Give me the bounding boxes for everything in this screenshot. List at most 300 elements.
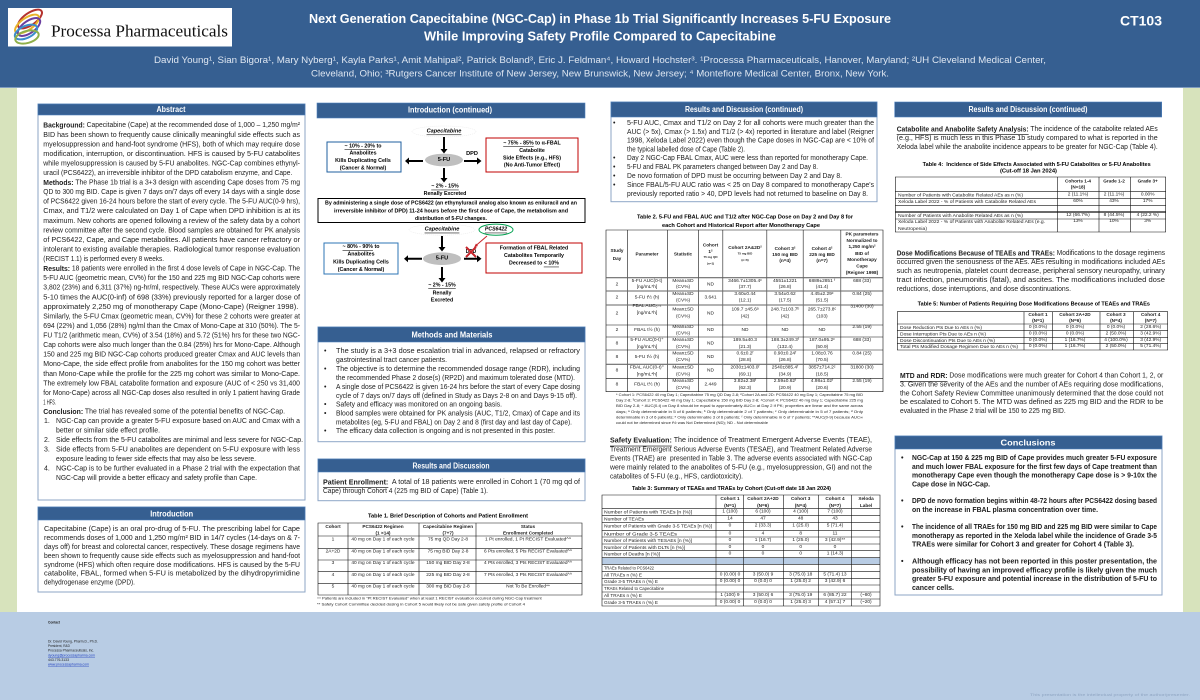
heading: results and discussion: Results and Discussion bbox=[412, 462, 490, 470]
table 2: PK parameters: (n=1) bbox=[707, 261, 714, 265]
box: catabolites reduced: Catabolites Temporarily bbox=[504, 253, 564, 259]
authors and affiliations: Cleveland, Ohio; ³Rutgers Cancer Institute of New Jersey, New Brunswick, New Jersey; ⁴ Montefiore Medical Center, Bronx, New York. bbox=[311, 68, 889, 80]
table 2 footnotes: Day 2-8; ³Cohort 3: PCS6422 40 mg Day 1; Capecitabine 150 mg BID Day 2-8; ⁴Cohort 4: PCS6422 40 mg Day 1; Capecitabine 225 mg bbox=[616, 399, 863, 403]
heading: abstract: Abstract bbox=[156, 105, 186, 114]
table 5: dose modifications bbox=[897, 312, 1168, 350]
panel: results and discussion bbox=[318, 459, 585, 501]
arrow: to renal excretion bbox=[438, 267, 446, 282]
table 1 footnotes: ** Safety Cohort Committee decided dosing in Cohort 5 would likely not be safe given safety profile of Cohort 4 bbox=[317, 602, 525, 606]
table 1: cohorts and enrollment: 4 bbox=[332, 572, 335, 578]
contact block: 443.776.3133 bbox=[48, 658, 69, 662]
methods bullet list: • bbox=[324, 410, 327, 418]
box: anabolites: ~ 10% - 20% to bbox=[345, 143, 382, 149]
table 2: PK parameters: 248.7±103.7ᵇ bbox=[771, 306, 799, 312]
table 2 footnotes: could not be determined since t½ was Not Determined (ND); ND - Not determinable bbox=[616, 421, 768, 425]
methods bullet list: cycle of 7 days on/7 days off (defined in Study as Days 2-8 on and Days 9-15 off). bbox=[336, 393, 577, 400]
table 2: PK parameters: BID of bbox=[855, 251, 869, 256]
conclusions bullet list: • bbox=[901, 556, 904, 566]
table 5: dose modifications: 0 (0.0%) bbox=[1029, 324, 1047, 330]
box: catabolites reduced: Formation of FBAL Related bbox=[500, 245, 568, 251]
dose modifications text: reductions, dose interruptions, and dose discontinuations. bbox=[897, 286, 1071, 293]
arrow: DPD to catabolite bbox=[464, 158, 482, 164]
table 2: PK parameters: ND bbox=[707, 354, 714, 360]
table 2: PK parameters: (103) bbox=[816, 314, 828, 320]
table 3: TEAEs and TRAEs by cohort: Grade 3-5 TRAEs n (%) E bbox=[604, 579, 658, 584]
table 2: PK parameters: 2.449 bbox=[704, 382, 717, 388]
table 4: side effects by catabolite and anabolite: Number of Patients with Catabolite Related AEs as n (%) bbox=[898, 192, 1024, 198]
table 2: PK parameters: ND bbox=[707, 282, 714, 288]
table 3: TEAEs and TRAEs by cohort: 1 (16.7) bbox=[755, 537, 772, 543]
table 3: TEAEs and TRAEs by cohort: (N=4) bbox=[795, 503, 807, 508]
table 2: PK parameters: Cohort 2A&2D² bbox=[728, 245, 762, 250]
table 4: side effects by catabolite and anabolite: Number of Patients with Anabolite Related AEs as n (%) bbox=[898, 213, 1024, 218]
table 3: TEAEs and TRAEs by cohort: 4 bbox=[762, 530, 765, 536]
box: anabolites: Kills Duplicating Cells bbox=[333, 259, 389, 265]
diagram: capecitabine metabolism without PCS6422 bbox=[327, 126, 578, 197]
box: catabolite: Side Effects (e.g., HFS) bbox=[503, 155, 561, 161]
table 2: PK parameters: 109.7 ±45.6ᵃ bbox=[731, 306, 759, 312]
safety evaluation text bbox=[609, 437, 872, 480]
conclusions bullet list: on the increase in FBAL plasma concentration over time. bbox=[912, 505, 1098, 514]
results bullet list: • bbox=[613, 182, 616, 189]
table 3: TEAEs and TRAEs by cohort: 0 (0.0) 0 bbox=[754, 578, 772, 584]
table 2: PK parameters: 1² bbox=[708, 249, 713, 254]
table 3: TEAEs and TRAEs by cohort: (N=7) bbox=[829, 503, 841, 508]
table 3: TEAEs and TRAEs by cohort: TRAEs Related to PCS6422 bbox=[604, 565, 654, 570]
table 2: PK parameters: ND bbox=[819, 327, 826, 333]
table 3: TEAEs and TRAEs by cohort: (N=1) bbox=[724, 503, 736, 508]
abstract text: approximately 2,250 mg of monotherapy Cape (Mono-Cape) (Reigner 1998). bbox=[43, 304, 298, 311]
title: Next Generation Capecitabine (NGC-Cap) in Phase 1b Trial Significantly Increases 5-FU Exposure bbox=[309, 12, 891, 26]
table 5 title: Table 5: Number of Patients Requiring Dose Modifications Because of TEAEs and TRAEs bbox=[918, 301, 1150, 307]
arrow: to anabolites bbox=[405, 158, 423, 164]
table 5: dose modifications: 4 (100.0%) bbox=[1104, 337, 1128, 343]
table 1: cohorts and enrollment: 6 Pts enrolled, 5 Pts RECIST Evaluated^^ bbox=[484, 548, 573, 554]
abstract text: of PCS6422, Cape, and Cape metabolites. All patients have cancer refractory or bbox=[43, 237, 301, 244]
table 2 title: Table 2. 5-FU and FBAL AUC and T1/2 after NGC-Cap Dose on Day 2 and Day 8 for bbox=[637, 214, 853, 220]
table 2 title bbox=[637, 214, 853, 229]
abstract text: 2. bbox=[44, 437, 50, 444]
introduction text: syndrome (HFS) which often require dose modifications. HFS is caused by the 5-FU bbox=[44, 562, 300, 569]
PCS6422 marker bbox=[479, 224, 513, 235]
table 3: TEAEs and TRAEs by cohort: 1 (14.3) bbox=[827, 550, 844, 556]
abstract text: 5-FU AUC (geometric mean, CV%) for the 150 and 225 mg BID NGC-Cap cohorts were bbox=[43, 275, 300, 282]
conclusions bullet list: The incidence of all TRAEs for 150 mg BID and 225 mg BID were similar to Cape bbox=[912, 522, 1157, 531]
table 2: PK parameters: 8 bbox=[616, 368, 619, 374]
table 5: dose modifications: 0 (0.0%) bbox=[1066, 324, 1084, 330]
results bullet list: • bbox=[613, 164, 616, 171]
table 5: dose modifications: 1 (16.7%) bbox=[1065, 343, 1086, 349]
table 1 footnotes bbox=[317, 596, 542, 606]
table 2: PK parameters: (CV%) bbox=[676, 330, 690, 336]
abstract text: NGC-Cap is to be further evaluated in a Phase 2 trial with the expectation that bbox=[56, 466, 300, 472]
icon: red X and inhibition arrow bbox=[466, 236, 487, 257]
table 2: PK parameters: [ng/mL*h] bbox=[637, 284, 657, 290]
table 3: TEAEs and TRAEs by cohort: Grade 3-5 TRAEs n (%) E bbox=[604, 600, 658, 605]
table 3: TEAEs and TRAEs by cohort: 0 bbox=[729, 537, 732, 543]
table 2: PK parameters: (17.5) bbox=[779, 298, 792, 304]
heading: results continued: Results and Discussion (continued) bbox=[685, 105, 803, 114]
abstract text: better or similar side effect profile. bbox=[56, 428, 160, 434]
abstract text: 4. bbox=[44, 466, 50, 472]
table 5: dose modifications: 2 (28.6%) bbox=[1140, 324, 1162, 330]
patient enrollment text bbox=[323, 479, 580, 495]
heading: results and discussion bbox=[318, 459, 585, 472]
table 2: PK parameters: 225 mg BID bbox=[809, 252, 835, 257]
box: catabolites reduced: Decreased to < 10% bbox=[509, 261, 559, 267]
dose modifications text bbox=[897, 250, 1166, 293]
table 3: TEAEs and TRAEs by cohort: Number of Patients with TESAEs [n (%)] bbox=[604, 538, 692, 543]
methods bullet list: • bbox=[324, 366, 327, 373]
methods bullet list: Safety and efficacy was monitored on an ongoing basis. bbox=[336, 402, 502, 408]
methods bullet list: • bbox=[324, 384, 327, 391]
table 1: cohorts and enrollment: PCS6422 Regimen bbox=[362, 524, 404, 529]
table 1: cohorts and enrollment: 1 Pt enrolled, 1 Pt RECIST Evaluated^^ bbox=[485, 536, 572, 542]
methods bullet list: A single dose of PCS6422 is given 16-24 hrs before the start of every Cape dosing bbox=[336, 384, 580, 391]
table 2: PK parameters: 2.55 (19) bbox=[852, 324, 872, 330]
table 2: PK parameters: (CV%) bbox=[676, 357, 690, 363]
table 1: cohorts and enrollment: 40 mg on Day 1 of each cycle bbox=[351, 548, 415, 554]
table 3: TEAEs and TRAEs by cohort: 3 (75.0) 19 bbox=[789, 592, 813, 598]
box: anabolites: (Cancer & Normal) bbox=[340, 165, 386, 171]
box: anabolites: ~ 80% - 90% to bbox=[343, 244, 380, 250]
table 2: PK parameters: (26.8) bbox=[779, 284, 792, 290]
table 3: TEAEs and TRAEs by cohort: 0 bbox=[729, 530, 732, 536]
table 2: PK parameters: (50.9) bbox=[816, 344, 829, 350]
table 2: PK parameters: PK parameters bbox=[845, 232, 879, 236]
table 2: PK parameters: 5-FU AUC(0-t) bbox=[632, 278, 663, 284]
table 2: PK parameters: (132.4) bbox=[777, 344, 793, 350]
table 2: PK parameters: (n=6) bbox=[741, 258, 749, 262]
authors and affiliations bbox=[154, 55, 1046, 80]
conclusions bullet list: possibility of having an improved efficacy profile is likely given the much bbox=[912, 565, 1157, 574]
table 3: TEAEs and TRAEs by cohort: 6 (100) bbox=[755, 508, 771, 514]
table 3: TEAEs and TRAEs by cohort: All TRAEs n (%) E bbox=[604, 572, 642, 578]
heading: introduction: Introduction bbox=[150, 510, 193, 518]
results bullet list: 5-FU and FBAL PK parameters changed between Day 2 and Day 8. bbox=[627, 164, 818, 171]
callout: PCS6422 explanation: By administering a single dose of PCS6422 (an ethynyluracil analog also known as eniluracil and an bbox=[325, 200, 578, 206]
table 3: TEAEs and TRAEs by cohort: 7 (100) bbox=[827, 508, 843, 514]
node: 5-FU bbox=[423, 252, 461, 265]
conclusions bullet list: • bbox=[901, 496, 904, 505]
table 3: TEAEs and TRAEs by cohort: (~20) bbox=[860, 599, 872, 605]
table 3: TEAEs and TRAEs by cohort: 2 (33.3) bbox=[755, 522, 772, 528]
table 1: cohorts and enrollment: Cohort bbox=[325, 524, 341, 529]
table 2: PK parameters: (70.5) bbox=[816, 357, 829, 363]
table 2: PK parameters: 265.7±273.8ᶜ bbox=[808, 306, 836, 312]
label: renally excreted: Renally Excreted bbox=[424, 191, 466, 197]
safety evaluation text: Events (TRAE) are presented in Table 3. The adverse events associated with NGC-Cap bbox=[610, 456, 872, 462]
MTD and RDR text: the Cohort Safety Review Committee unanimously determined that the dose could not bbox=[900, 390, 1163, 398]
diagram: capecitabine metabolism without PCS6422: Capecitabine bbox=[427, 128, 461, 134]
table 2: PK parameters: (12.1) bbox=[739, 298, 752, 304]
table 3: TEAEs and TRAEs by cohort: 14 bbox=[727, 516, 733, 522]
abstract text bbox=[42, 122, 303, 482]
results bullet list: AUC (> 5x), Cmax (> 1.5x) and T1/2 (> 4x) reported in literature and label (Reigner bbox=[627, 129, 875, 136]
table 2: PK parameters: 189.5±40.3 bbox=[733, 337, 757, 343]
table 2: PK parameters: (21.3) bbox=[739, 344, 752, 350]
conclusions bullet list: • bbox=[901, 453, 904, 462]
table 2: PK parameters: FBAL t½ (h) bbox=[634, 380, 660, 388]
methods bullet list: Blood samples were obtained for PK analysis (AUC, T1/2, Cmax) of Cape and its bbox=[336, 410, 580, 418]
abstract text: The extremely low FBAL catabolite formation and exposure (AUC of < 250 vs 31,400 bbox=[43, 380, 300, 387]
table 2: PK parameters: [ng/mL*h] bbox=[637, 372, 657, 378]
table 4: side effects by catabolite and anabolite: Xeloda Label 2022 - % of Patients with Catabolite Related AEs bbox=[898, 199, 1037, 204]
contact block: Processa Pharmaceuticals, Inc. bbox=[48, 649, 94, 653]
table 3: TEAEs and TRAEs by cohort: 1 (25.0) bbox=[792, 522, 809, 528]
table 2: PK parameters: (42) bbox=[781, 314, 790, 320]
table 2: PK parameters: 2.55 (19) bbox=[852, 378, 872, 384]
table 5: dose modifications: 0 (0.0%) bbox=[1029, 343, 1047, 349]
table 5: dose modifications: Total Pts Modified Dosage Regimen Due to AEs n (%) bbox=[900, 344, 1018, 349]
title bbox=[309, 12, 891, 44]
table 2: PK parameters: 2 bbox=[616, 294, 619, 300]
abstract text: QD to 300 mg BID. Cape is given 7 days on/7 days off every 14 days with a single dose bbox=[43, 189, 300, 196]
abstract text: BID has been shown to frequently cause clinically meaningful side effects such as bbox=[43, 132, 300, 139]
table 3: TEAEs and TRAEs by cohort: 1 (25.0) 2 bbox=[790, 578, 811, 584]
table 3: TEAEs and TRAEs by cohort: 48 bbox=[798, 516, 804, 522]
table 2: PK parameters: 688 (33) bbox=[853, 337, 871, 343]
table 2: PK parameters: 8 bbox=[616, 382, 619, 388]
table 4: side effects by catabolite and anabolite: 0.00% bbox=[1141, 192, 1155, 198]
table 2 title: each Cohort and Historical Report after Monotherapy Cape bbox=[662, 223, 820, 229]
results bullet list: previously reported ratio > 40, DPD levels had not returned to baseline on Day 8. bbox=[627, 191, 868, 198]
table 2: PK parameters: 6889±2851 ᶠ bbox=[809, 278, 835, 284]
table 3: TEAEs and TRAEs by cohort: 0 bbox=[834, 544, 837, 550]
table 3: TEAEs and TRAEs by cohort: Cohort 4 bbox=[825, 496, 845, 501]
table 3: TEAEs and TRAEs by cohort: 5 (71.4) bbox=[827, 522, 844, 528]
panel: introduction bbox=[38, 507, 305, 592]
table 2: PK parameters bbox=[606, 230, 883, 392]
table 2: PK parameters: (CV%) bbox=[676, 284, 690, 290]
table 4: side effects by catabolite and anabolite: 8 (44.5%) bbox=[1104, 212, 1125, 218]
table 2: PK parameters: ND bbox=[742, 327, 749, 333]
table 3: TEAEs and TRAEs by cohort: 3 (42.9)** bbox=[825, 537, 845, 543]
patient enrollment text: Cape) through Cohort 4 (225 mg BID of Cape) (Table 1). bbox=[323, 488, 488, 495]
safety evaluation text: were mainly related to the anabolites of 5-FU (e.g., myelosuppression, GI) and not the bbox=[609, 464, 872, 472]
table 3: TEAEs and TRAEs by cohort: 1 (100) 9 bbox=[720, 592, 740, 598]
MTD and RDR text: 3. Given the severity of the AEs and the number of AEs requiring dose modifications, bbox=[900, 382, 1163, 388]
table 2: PK parameters: 2540±885.4ᶠ bbox=[772, 364, 798, 370]
table 4: side effects by catabolite and anabolite: Grade 1-2 bbox=[1103, 178, 1125, 184]
table 3: TEAEs and TRAEs by cohort: 1 (100) bbox=[722, 508, 738, 514]
table 2: PK parameters: Day bbox=[613, 256, 622, 261]
introduction text: Capecitabine (Cape) is an oral pro-drug of 5-FU. The prescribing label for Cape bbox=[44, 526, 300, 533]
node: 5-FU bbox=[425, 154, 463, 166]
abstract text: review committee after the second cycle. Blood samples are obtained for PK analysis bbox=[43, 227, 300, 234]
table 2: PK parameters: ND bbox=[707, 310, 714, 316]
table 3: TEAEs and TRAEs by cohort: Cohort 1 bbox=[720, 496, 740, 501]
table 4: side effects by catabolite and anabolite: Neutropenia) bbox=[898, 226, 928, 231]
dose modifications text: tract infection, pneumonitis (fatal), and ascites. The modifications included dose bbox=[897, 277, 1165, 284]
table 2: PK parameters: (CV%) bbox=[676, 344, 690, 350]
contact block: dyoung@processapharma.com bbox=[48, 653, 95, 657]
label: renally excreted: Excreted bbox=[431, 298, 453, 304]
table 4 title bbox=[923, 162, 1151, 174]
table 2: PK parameters: Mean±SD bbox=[672, 337, 694, 343]
table 2: PK parameters: 1,250 mg/m² bbox=[848, 244, 876, 249]
methods bullet list: The objective is to determine the recommended dosage range (RDR), including bbox=[336, 366, 580, 373]
table 2: PK parameters: Cape bbox=[856, 264, 868, 268]
results bullet list: De novo formation of DPD must be occurring between Day 2 and Day 8. bbox=[627, 173, 842, 180]
results bullet list: • bbox=[613, 173, 616, 180]
table 2: PK parameters: Mean±SD bbox=[672, 291, 694, 297]
box: anabolites: Kills Duplicating Cells bbox=[335, 158, 391, 164]
logo bbox=[8, 6, 232, 47]
table 2: PK parameters: 3466.7±1305.4ᶜ bbox=[728, 278, 762, 284]
abstract text: Cmax, and T1/2 were calculated on Day 1 of Cape when DPD inhibition is at its bbox=[43, 208, 301, 215]
abstract text: Similarly, the 5-FU Cmax (geometric mean, CV%) for these 2 cohorts were greater at bbox=[43, 313, 300, 320]
abstract text: for Mono-Cape) across all NGC-Cap doses also resulted in only 1 patient having Grade bbox=[43, 390, 300, 397]
table 2: PK parameters: (34.9) bbox=[779, 372, 792, 378]
table 2: PK parameters: ND bbox=[782, 327, 789, 333]
box: catabolites reduced bbox=[486, 243, 582, 273]
abstract text: Side effects from 5-FU anabolites are dependent on 5-FU exposure with less bbox=[56, 446, 301, 454]
table 3: TEAEs and TRAEs by cohort: 3 (50.0) 9 bbox=[753, 572, 774, 578]
results bullet list: Since FBAL/5-FU AUC ratio was < 25 on Day 8 compared to monotherapy Cape's bbox=[627, 182, 874, 189]
header band bbox=[0, 0, 1200, 88]
table 3: TEAEs and TRAEs by cohort: 1 (25.0) bbox=[792, 537, 809, 543]
heading: results continued column 4: Results and Discussion (continued) bbox=[968, 105, 1088, 114]
abstract text: myelosuppression and hand-foot syndrome (HFS), both of which may require dose bbox=[43, 141, 300, 148]
results bullet list: • bbox=[613, 155, 616, 162]
table 2: PK parameters: (18.5) bbox=[816, 372, 829, 378]
table 2: PK parameters: ND bbox=[707, 340, 714, 346]
table 3: TEAEs and TRAEs by cohort: 3 (75.0) 18 bbox=[789, 572, 813, 578]
table 3: TEAEs and TRAEs by cohort: 1 (25.0) 3 bbox=[790, 599, 811, 605]
methods bullet list: • bbox=[324, 428, 327, 435]
table 3: TEAEs and TRAEs by cohort: 0 bbox=[762, 550, 765, 556]
label: DPD: DPD bbox=[466, 249, 477, 255]
table 2: PK parameters: 4.98±1.02ᶠ bbox=[811, 378, 833, 384]
PCS6422 marker: PCS6422 bbox=[485, 227, 507, 233]
table 1: cohorts and enrollment bbox=[318, 523, 582, 595]
table 1: cohorts and enrollment: 300 mg BID Day 2-8 bbox=[426, 584, 470, 590]
table 2: PK parameters: Statistic bbox=[674, 252, 693, 256]
table 2 footnotes: days; ᵃ Only determinable in 5 of 6 patients; ᵇ Only determinable 2 of 7 patients; ᶜ Only determinable in 5 of 7 patients; ᵈ Only bbox=[616, 410, 863, 414]
table 2: PK parameters: (CV%) bbox=[676, 372, 690, 378]
table 2: PK parameters: FBAL t½ (h) bbox=[634, 326, 660, 333]
abstract text: 3,802 (23%) and 6,311 (37%) ng-hr/ml, respectively. These AUCs were approximately bbox=[43, 285, 300, 292]
authors and affiliations: David Young¹, Sian Bigora¹, Mary Nyberg¹, Kayla Parks¹, Amit Mahipal², Patrick Boland³, Eric J. Feldman⁴, Howard Hochster³. ¹Processa Pharmaceuticals, Hanover, Maryland; ²UH Cleveland Medical Center, bbox=[154, 55, 1046, 66]
table 3 title: Table 3: Summary of TEAEs and TRAEs by Cohort (Cut-off date 18 Jan 2024) bbox=[632, 486, 831, 492]
abstract text: Conclusion: The trial has revealed some of the potential benefits of NGC-Cap. bbox=[43, 408, 285, 416]
table 2: PK parameters: (69.1) bbox=[739, 372, 752, 378]
box: catabolite: Catabolite bbox=[519, 148, 545, 154]
table 2: PK parameters: (20.6) bbox=[816, 385, 829, 391]
methods bullet list: metabolites (eg, 5-FU and FBAL) on Day 2 and 8 (first day and last day of Cape). bbox=[336, 420, 572, 426]
safety evaluation text: catabolites of 5-FU (e.g., HFS, cardiotoxicity). bbox=[610, 474, 743, 480]
table 2: PK parameters: Mean±SD bbox=[672, 364, 694, 370]
table 2: PK parameters: Mean±SD bbox=[672, 306, 694, 312]
abstract text: 1. bbox=[44, 418, 50, 425]
table 2: PK parameters: (n=7) bbox=[816, 258, 828, 263]
table 1: cohorts and enrollment: 40 mg on Day 1 of each cycle bbox=[351, 572, 415, 578]
table 3: TEAEs and TRAEs by cohort: 6 (85.7) 22 bbox=[823, 592, 847, 598]
table 3: TEAEs and TRAEs by cohort: 0 (0.00) 0 bbox=[720, 599, 741, 605]
table 4: side effects by catabolite and anabolite: 12 (66.7%) bbox=[1066, 212, 1090, 218]
MTD and RDR text: MTD and RDR: Dose modifications were much greater for Cohort 4 than Cohort 1, 2, or bbox=[900, 372, 1164, 380]
contact block: Contact bbox=[48, 621, 61, 625]
node: 5-FU: 5-FU bbox=[438, 157, 450, 163]
table 2: PK parameters: 8 bbox=[616, 354, 619, 360]
table 2: PK parameters: (CV%) bbox=[676, 314, 690, 320]
table 2: PK parameters: (CV%) bbox=[676, 385, 690, 391]
catabolite and anabolite text bbox=[897, 126, 1158, 151]
table 5: dose modifications: Dose Reduction Pts Due to AEs n (%) bbox=[900, 325, 982, 330]
conclusions bullet list: TRAEs were similar for Cohort 3 and greater for Cohort 4 (Table 3). bbox=[912, 540, 1134, 549]
table 2: PK parameters: 2.59±0.62ᶠ bbox=[774, 378, 796, 384]
catabolite and anabolite text: Xeloda label while the anabolite incidence appears to be greater for NGC-Cap (Table 4). bbox=[897, 144, 1158, 151]
table 5: dose modifications: 2 (50.0%) bbox=[1106, 343, 1127, 349]
table 2: PK parameters: Monotherapy bbox=[847, 257, 877, 262]
table 3: TEAEs and TRAEs by cohort: 8 bbox=[799, 530, 802, 536]
table 4: side effects by catabolite and anabolite: 13% bbox=[1073, 218, 1084, 224]
heading: introduction bbox=[38, 507, 305, 520]
table 2: PK parameters: Cohort bbox=[703, 242, 719, 248]
diagram: capecitabine metabolism with PCS6422: Capecitabine bbox=[425, 227, 459, 233]
abstract text: Background: Capecitabine (Cape) at the recommended dose of 1,000 – 1,250 mg/m² bbox=[43, 122, 301, 129]
logo: Processa Pharmaceuticals bbox=[51, 22, 228, 40]
table 2: PK parameters: 2 bbox=[616, 327, 619, 333]
contact block: President, R&D bbox=[48, 644, 70, 648]
abstract text: than Mono-Cape while the profile for the 225 mg cohort was similar to Mono-Cape. bbox=[43, 371, 300, 378]
table 2: PK parameters: Mean±SD bbox=[672, 278, 694, 284]
MTD and RDR text bbox=[900, 372, 1164, 415]
safety evaluation text: Treatment Emergent Serious Adverse Events (TESAE), and Treatment Related Adverse bbox=[610, 446, 872, 454]
table 4: side effects by catabolite and anabolite: Xeloda Label 2022 - % of Patients with Anabolite Related AEs (e.g. bbox=[898, 219, 1045, 224]
table 1: cohorts and enrollment: (1 ×14) bbox=[376, 531, 391, 536]
table 2: PK parameters: (n=4) bbox=[779, 258, 791, 263]
table 3: TEAEs and TRAEs by cohort: 0 bbox=[729, 522, 732, 528]
table 2: PK parameters: 4551±1221 bbox=[773, 278, 797, 284]
results bullet list: Day 2 NGC-Cap FBAL Cmax, AUC were less than reported for monotherapy Cape. bbox=[627, 155, 868, 162]
results bullet list: 1998, Xeloda Label 2022) even though the Cape doses in NGC-Cap are < 10% of bbox=[627, 138, 874, 144]
abstract text: of PCS6422 given 16-24 hours before the start of every cycle. The 5-FU AUC(0-9 hrs), bbox=[43, 199, 300, 206]
box: catabolite bbox=[486, 138, 578, 172]
table 3: TEAEs and TRAEs by cohort: Cohort 3 bbox=[791, 496, 811, 501]
table 5: dose modifications: 1 (16.7%) bbox=[1065, 337, 1086, 343]
panel: results and discussion continued bbox=[611, 102, 877, 202]
table 1: cohorts and enrollment: 225 mg BID Day 2-8 bbox=[426, 572, 470, 578]
table 2: PK parameters: 0.84 (25) bbox=[852, 291, 872, 297]
patient enrollment text: Patient Enrollment: A total of 18 patients were enrolled in Cohort 1 (70 mg qd of bbox=[323, 479, 580, 486]
table 2 footnotes: * Cohort 1: PCS6422 40 mg Day 1; Capecitabine 75 mg QD Day 2-8; ²Cohort 2A and 2D: PCS6422 40 mg Day 1; Capecitabine 75 mg BID bbox=[616, 393, 863, 397]
results bullet list bbox=[613, 120, 875, 198]
table 2: PK parameters: 0.90±0.24ᶠ bbox=[774, 350, 796, 356]
dose modifications text: such as neutropenia, platelet count decrease, peripheral sensory neuropathy, urinary bbox=[897, 268, 1166, 275]
conclusions bullet list bbox=[901, 453, 1158, 592]
conclusions bullet list: • bbox=[901, 522, 904, 531]
table 3: TEAEs and TRAEs by cohort: 47 bbox=[760, 516, 766, 522]
label: renally excreted: ~ 2% - 15% bbox=[428, 282, 456, 288]
heading: methods and materials bbox=[318, 327, 585, 342]
table 4: side effects by catabolite and anabolite: Grade 3+ bbox=[1138, 178, 1158, 184]
table 3: TEAEs and TRAEs by cohort: (N=6) bbox=[757, 503, 769, 508]
table 5: dose modifications: 0 (0.0%) bbox=[1107, 324, 1125, 330]
table 2: PK parameters: FBAL AUC(0-t)⁺ bbox=[630, 364, 665, 370]
table 4: side effects by catabolite and anabolite: 17% bbox=[1143, 198, 1153, 204]
abstract text: uracil (PCS6422), an irreversible inhibitor of the DPD catabolism enzyme, and Cape. bbox=[43, 170, 292, 177]
label: DPD: DPD bbox=[466, 151, 478, 157]
table 2: PK parameters: Mean±SD bbox=[672, 324, 694, 330]
heading: methods and materials: Methods and Materials bbox=[412, 330, 493, 340]
table 1: cohorts and enrollment: Capecitabine Regimen bbox=[423, 524, 473, 529]
table 3: TEAEs and TRAEs by cohort: Number of Deaths [n (%)] bbox=[604, 552, 660, 556]
table 2: PK parameters: 3.82±2.38ᶠ bbox=[734, 378, 756, 384]
table 3: TEAEs and TRAEs by cohort: Number of Patients with Grade 3-5 TEAEs [n (%)] bbox=[604, 524, 712, 528]
table 3: TEAEs and TRAEs by cohort: 3 (42.9) 6 bbox=[825, 578, 846, 584]
